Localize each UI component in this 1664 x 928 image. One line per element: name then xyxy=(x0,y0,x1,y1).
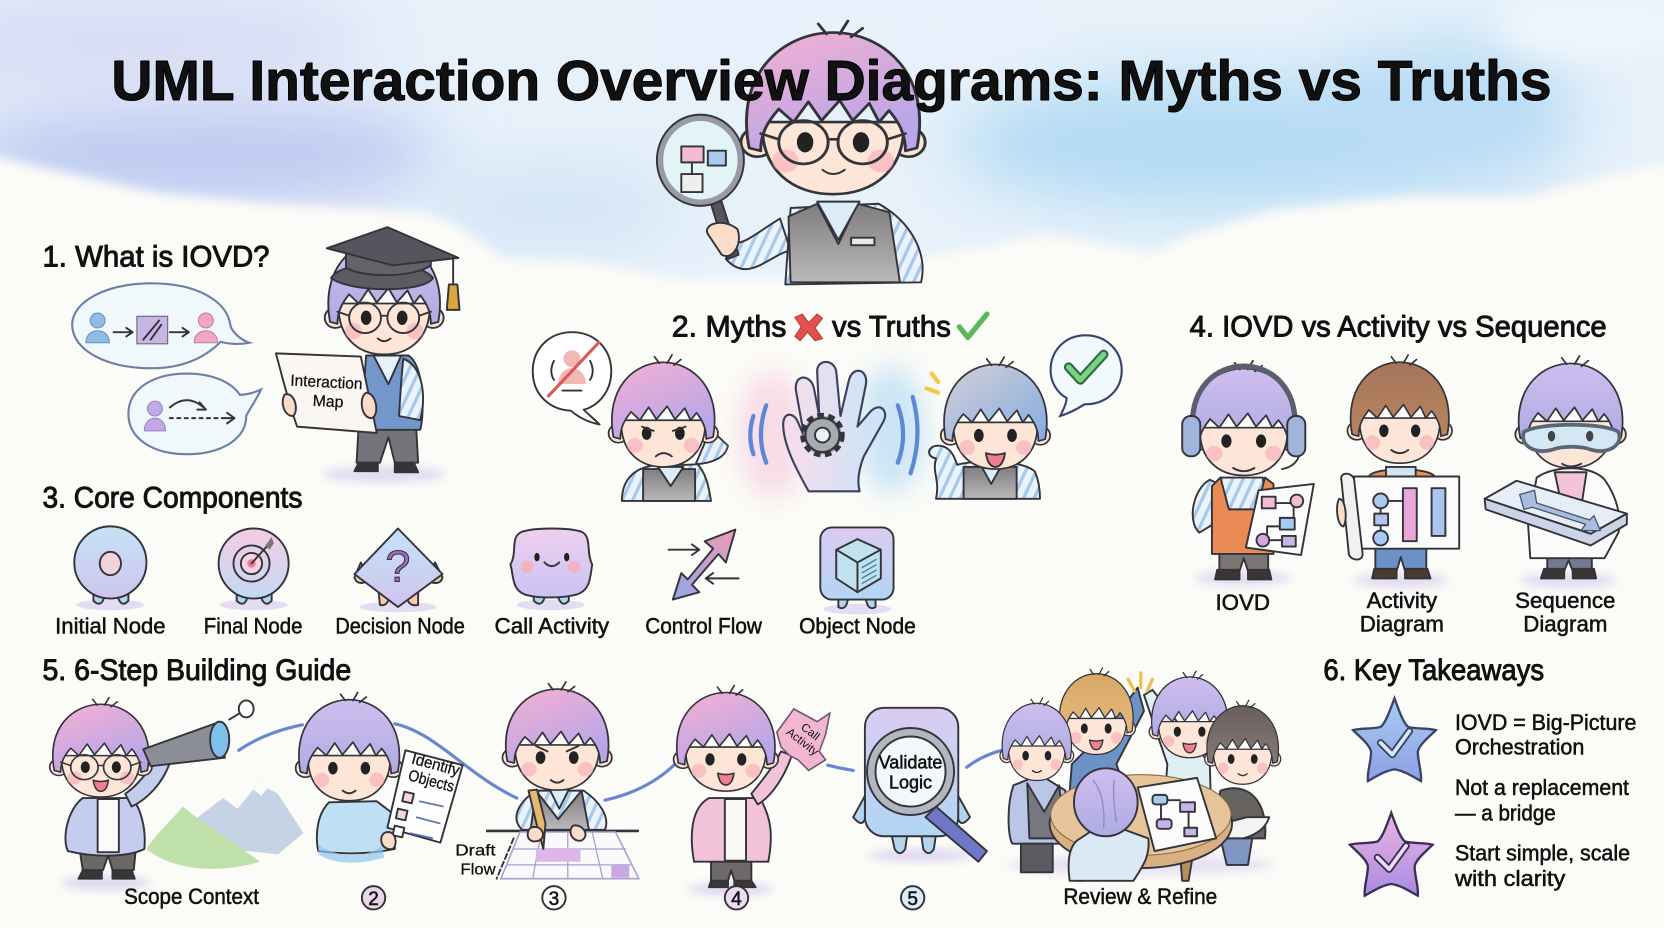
icon: blue star xyxy=(1353,698,1436,781)
section 1: what is IOVD xyxy=(42,227,460,483)
activity label xyxy=(1360,588,1444,636)
takeaway 1: Orchestration xyxy=(1455,735,1584,760)
speech bubble: sequence xyxy=(128,374,261,454)
path connecting steps xyxy=(239,724,1002,800)
title: UML Interaction Overview Diagrams: Myths vs Truths xyxy=(111,49,1552,112)
heading 4: 4. IOVD vs Activity vs Sequence xyxy=(1190,310,1607,343)
main character with magnifier xyxy=(657,21,925,284)
step number 5 xyxy=(901,886,924,910)
activity character xyxy=(1337,355,1459,636)
step number 2 xyxy=(362,886,385,910)
hand with gear xyxy=(739,362,925,499)
heading 2 xyxy=(672,310,987,343)
section 4: comparison xyxy=(1182,310,1627,636)
object node: Object Node xyxy=(799,614,916,639)
step number 4: 4 xyxy=(731,889,742,910)
step 2: identify objects: Objects xyxy=(406,767,456,796)
takeaway 1: IOVD = Big-Picture xyxy=(1455,710,1636,735)
initial node xyxy=(55,526,166,639)
icon: purple star xyxy=(1350,813,1433,896)
step 4: call activity: Activity xyxy=(784,726,821,759)
decision node xyxy=(335,528,465,639)
review label: Review & Refine xyxy=(1063,884,1217,909)
sequence label xyxy=(1515,588,1615,636)
step 4: call activity xyxy=(674,685,830,896)
IOVD label: IOVD xyxy=(1215,590,1270,615)
IOVD character xyxy=(1182,361,1314,615)
step 2: identify objects xyxy=(296,692,463,863)
confused character xyxy=(609,355,728,501)
step number 2: 2 xyxy=(368,889,379,910)
final node xyxy=(204,528,302,639)
control flow xyxy=(645,530,763,639)
map text: Map xyxy=(312,393,344,411)
takeaway 1 xyxy=(1455,710,1636,760)
takeaway 3 xyxy=(1454,841,1630,891)
section 6: key takeaways xyxy=(1323,654,1636,896)
activity label: Diagram xyxy=(1360,611,1444,636)
takeaway 2 xyxy=(1455,775,1630,825)
step 5: validate logic: Logic xyxy=(889,772,932,792)
section 3: core components xyxy=(42,481,916,639)
graduate character holding map xyxy=(276,227,460,483)
step 5: validate logic xyxy=(853,708,987,862)
map text xyxy=(289,372,363,412)
step 4: call activity: Call xyxy=(798,721,822,743)
heading 6: 6. Key Takeaways xyxy=(1323,654,1544,687)
heading 2: vs Truths xyxy=(832,310,951,343)
initial node: Initial Node xyxy=(55,614,166,639)
step 5: validate logic: Validate xyxy=(879,752,942,772)
watercolor sky xyxy=(0,0,1664,297)
final node: Final Node xyxy=(204,614,302,639)
call activity: Call Activity xyxy=(495,614,610,639)
takeaway 3: with clarity xyxy=(1454,866,1566,891)
map text: Interaction xyxy=(290,372,363,393)
call activity xyxy=(495,528,610,639)
step 6: team review xyxy=(1000,668,1281,909)
step 3: draft flow xyxy=(455,682,639,879)
sequence label: Sequence xyxy=(1515,588,1615,613)
happy character xyxy=(926,357,1050,499)
step 1: scope context xyxy=(50,698,304,909)
step number 3 xyxy=(542,886,566,910)
step number 4 xyxy=(725,886,748,910)
heading 1: 1. What is IOVD? xyxy=(42,240,270,273)
step 2: identify objects: Identify xyxy=(410,751,461,780)
decision node: ? xyxy=(386,543,410,592)
section 2: myths vs truths xyxy=(533,310,1122,501)
speech bubble: orchestration xyxy=(72,283,249,368)
activity label: Activity xyxy=(1367,588,1438,613)
sequence label: Diagram xyxy=(1523,611,1607,636)
step number 3: 3 xyxy=(549,889,559,910)
section 5: six-step guide xyxy=(42,654,1281,910)
myth bubble crossed out xyxy=(533,332,611,424)
heading 5: 5. 6-Step Building Guide xyxy=(42,654,351,687)
scope label: Scope Context xyxy=(124,884,260,909)
step number 5: 5 xyxy=(907,889,918,910)
draft flow label: Draft xyxy=(455,842,496,859)
takeaway 2: Not a replacement xyxy=(1455,775,1630,800)
control flow: Control Flow xyxy=(645,614,763,639)
decision node: Decision Node xyxy=(335,614,465,639)
truth bubble with check xyxy=(1051,335,1122,416)
draft flow label: Flow xyxy=(461,861,496,878)
takeaway 3: Start simple, scale xyxy=(1455,841,1630,866)
heading 2: 2. Myths xyxy=(672,310,786,343)
heading 3: 3. Core Components xyxy=(42,481,302,514)
object node xyxy=(799,527,916,639)
takeaway 2: — a bridge xyxy=(1455,800,1556,825)
draft flow label xyxy=(455,842,496,878)
sequence character xyxy=(1485,356,1627,636)
